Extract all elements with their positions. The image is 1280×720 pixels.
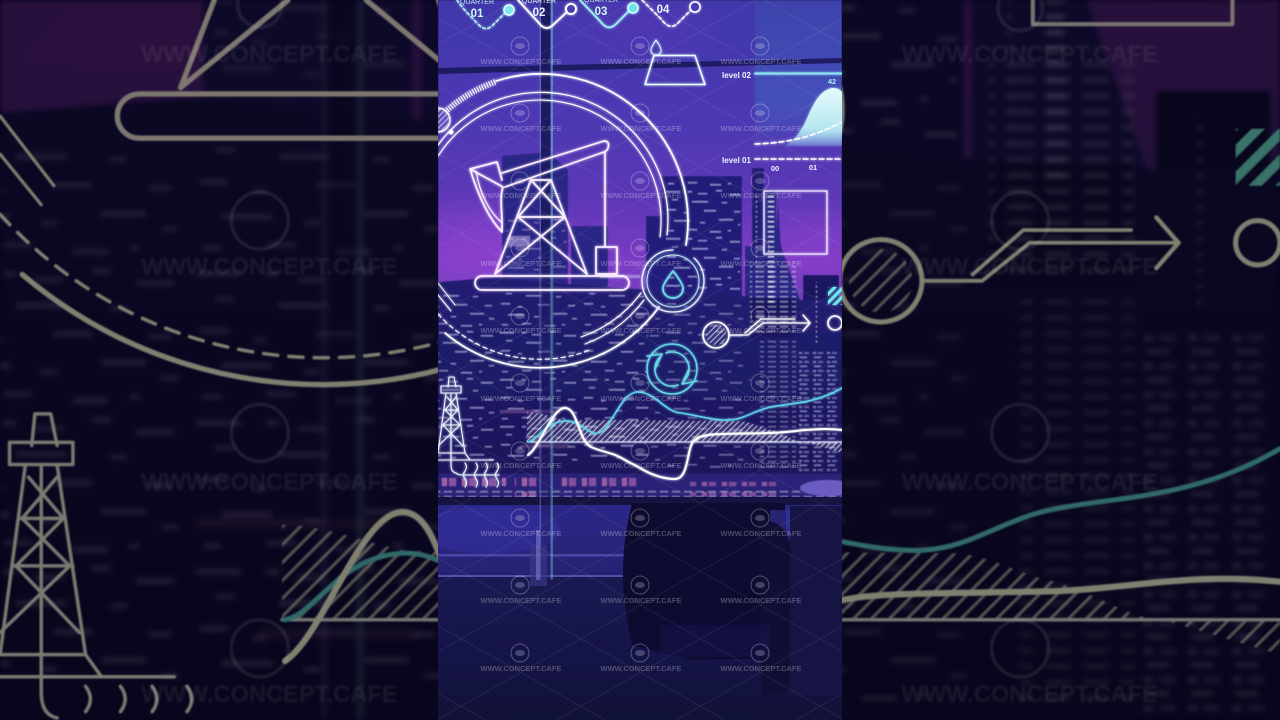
watermark text: WWW.CONCEPT.CAFE	[720, 326, 802, 335]
outlined square top	[764, 191, 827, 246]
watermark text: WWW.CONCEPT.CAFE	[480, 326, 562, 335]
axis labels: 42	[828, 77, 836, 86]
chart: production area	[755, 74, 842, 159]
chart: quarter 02 solid connector	[518, 0, 576, 28]
panel: blurred side backgrounds: WWW.CONCEPT.CAFE	[141, 41, 398, 68]
middle HUD elements	[438, 246, 842, 473]
chart: quarter 04 dashed connector	[642, 0, 700, 26]
chart: quarter 01 dashed connector	[457, 0, 514, 29]
watermark text: WWW.CONCEPT.CAFE	[480, 191, 562, 200]
watermark text: WWW.CONCEPT.CAFE	[600, 529, 682, 538]
axis labels: level 01	[722, 156, 751, 165]
outlined square bottom	[764, 246, 827, 254]
HUD line graphics	[426, 0, 842, 487]
watermark text: WWW.CONCEPT.CAFE	[480, 57, 562, 66]
upper sky and skyline tops	[438, 0, 856, 500]
gauge: upper rings	[426, 74, 688, 245]
watermark text: WWW.CONCEPT.CAFE	[600, 57, 682, 66]
watermark text: WWW.CONCEPT.CAFE	[480, 124, 562, 133]
quarter labels: 04	[657, 4, 670, 16]
watermark text: WWW.CONCEPT.CAFE	[720, 191, 802, 200]
panel: blurred side backgrounds: WWW.CONCEPT.CAFE	[901, 681, 1158, 708]
watermark text: WWW.CONCEPT.CAFE	[600, 191, 682, 200]
panel: central video frame	[420, 0, 856, 720]
watermark text: WWW.CONCEPT.CAFE	[600, 664, 682, 673]
floor	[438, 576, 842, 720]
axis labels: 01	[809, 163, 817, 172]
watermark text: WWW.CONCEPT.CAFE	[720, 259, 802, 268]
watermark text: WWW.CONCEPT.CAFE	[720, 57, 802, 66]
axis labels	[722, 71, 836, 173]
city night background	[420, 0, 856, 720]
watermark text: WWW.CONCEPT.CAFE	[720, 596, 802, 605]
watermark text: WWW.CONCEPT.CAFE	[600, 596, 682, 605]
quarter labels	[460, 0, 670, 17]
watermark text: WWW.CONCEPT.CAFE	[480, 461, 562, 470]
watermark text: WWW.CONCEPT.CAFE	[480, 394, 562, 403]
dark lounge chair silhouettes	[623, 503, 790, 660]
watermark text: WWW.CONCEPT.CAFE	[720, 394, 802, 403]
railings	[438, 554, 624, 556]
panel: blurred side backgrounds: WWW.CONCEPT.CAFE	[901, 253, 1158, 280]
watermark text: WWW.CONCEPT.CAFE	[600, 394, 682, 403]
axis labels: level 02	[722, 71, 751, 80]
panel: blurred side backgrounds: WWW.CONCEPT.CAFE	[901, 469, 1158, 496]
quarter labels: 02	[533, 7, 545, 19]
watermark diamonds	[438, 0, 842, 720]
lower HUD elements	[456, 440, 695, 487]
chart: hatched area and trend lines	[527, 388, 842, 468]
axis labels: 00	[771, 164, 779, 173]
watermark text: WWW.CONCEPT.CAFE	[480, 596, 562, 605]
watermark text: WWW.CONCEPT.CAFE	[600, 124, 682, 133]
icon: oil pump jack lower	[475, 246, 629, 290]
watermark coffee cup icons	[511, 37, 769, 662]
icon: oil pump jack upper	[470, 141, 608, 246]
watermark text: WWW.CONCEPT.CAFE	[600, 259, 682, 268]
icon: recycle circular arrows	[647, 344, 697, 394]
icon: drop in circle	[642, 250, 704, 312]
watermark text	[480, 57, 802, 673]
icon: small drilling derrick	[438, 377, 498, 473]
derrick pipe and drips	[456, 471, 499, 487]
water	[438, 505, 842, 577]
watermark text: WWW.CONCEPT.CAFE	[720, 461, 802, 470]
window frame	[438, 58, 842, 74]
panel: blurred side backgrounds: WWW.CONCEPT.CAFE	[141, 681, 398, 708]
trend line dip	[640, 440, 695, 479]
mid city band	[438, 246, 842, 474]
watermark text: WWW.CONCEPT.CAFE	[480, 529, 562, 538]
watermark text: WWW.CONCEPT.CAFE	[720, 124, 802, 133]
watermark text: WWW.CONCEPT.CAFE	[480, 259, 562, 268]
watermark text: WWW.CONCEPT.CAFE	[720, 529, 802, 538]
panel: blurred side backgrounds: WWW.CONCEPT.CAFE	[901, 41, 1158, 68]
hatched cyan accent	[828, 287, 842, 305]
chart: quarter 03 solid connector	[580, 0, 638, 27]
panel: blurred side backgrounds: WWW.CONCEPT.CAFE	[141, 469, 398, 496]
upper HUD elements	[426, 0, 842, 246]
chart labels	[460, 0, 836, 173]
arrow: hatched node to right	[703, 315, 842, 348]
watermark text: WWW.CONCEPT.CAFE	[600, 461, 682, 470]
quarter labels: 01	[471, 8, 484, 20]
gauge: lower rings	[438, 283, 659, 368]
watermark text: WWW.CONCEPT.CAFE	[720, 664, 802, 673]
icon: oil drop over tank	[645, 40, 705, 84]
panel: blurred side backgrounds: WWW.CONCEPT.CAFE	[141, 253, 398, 280]
watermark text: WWW.CONCEPT.CAFE	[480, 664, 562, 673]
quarter labels: 03	[595, 6, 607, 18]
watermark text: WWW.CONCEPT.CAFE	[600, 326, 682, 335]
